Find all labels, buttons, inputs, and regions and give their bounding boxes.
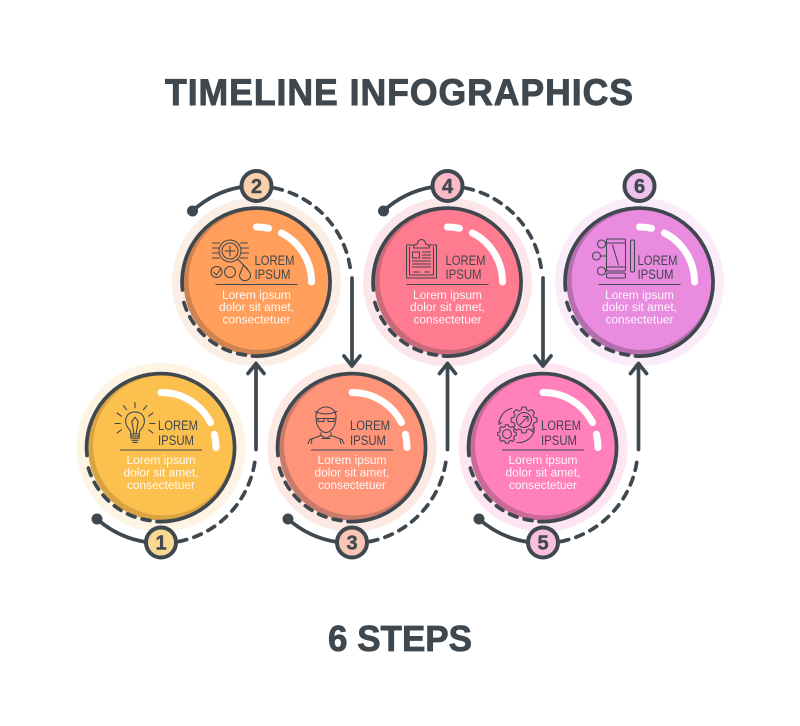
body text: consectetuer xyxy=(414,314,482,326)
body text: consectetuer xyxy=(606,314,674,326)
body text: dolor sit amet, xyxy=(314,468,390,480)
panel: step 3: IPSUM xyxy=(350,433,386,448)
number badge 3 xyxy=(337,528,367,558)
body text: dolor sit amet, xyxy=(506,468,580,480)
halos behind the step circles xyxy=(76,198,724,532)
title: TIMELINE INFOGRAPHICS xyxy=(165,72,634,113)
body text xyxy=(506,455,580,492)
body text: dolor sit amet, xyxy=(410,302,485,314)
body text: consectetuer xyxy=(127,480,195,492)
heading: LOREM xyxy=(254,253,294,268)
icon: devices xyxy=(592,239,634,278)
connector and arrow xyxy=(187,187,360,366)
number badge 3: 3 xyxy=(346,532,358,554)
number badge 6 xyxy=(624,171,654,201)
body text xyxy=(124,455,198,492)
icon: magnifier and checks xyxy=(211,240,250,281)
body text: Lorem ipsum xyxy=(318,455,386,467)
connector and arrow xyxy=(282,364,456,542)
heading: LOREM xyxy=(638,253,678,268)
body text xyxy=(314,455,390,492)
body text xyxy=(219,290,294,326)
panel: step 2 xyxy=(182,171,360,366)
number badge 1: 1 xyxy=(155,532,167,554)
panel: step 1: IPSUM xyxy=(158,433,194,448)
body text xyxy=(602,290,677,326)
number badge 5 xyxy=(528,528,558,558)
panel: step 6 xyxy=(565,171,713,356)
heading: LOREM xyxy=(350,418,390,433)
body text: dolor sit amet, xyxy=(219,302,294,314)
body text xyxy=(410,290,485,326)
icon: person with glasses xyxy=(308,407,344,444)
icon: clipboard xyxy=(406,240,436,278)
panel: step 3 xyxy=(278,364,456,558)
connector and arrow xyxy=(474,364,646,542)
panel: step 6: IPSUM xyxy=(638,267,674,282)
icon: gears xyxy=(498,407,537,443)
connector and arrow xyxy=(92,364,264,542)
number badge 2: 2 xyxy=(251,176,262,198)
panel: step 4: IPSUM xyxy=(446,267,482,282)
heading: LOREM xyxy=(446,253,486,268)
number badge 5: 5 xyxy=(537,532,549,554)
number badge 4 xyxy=(432,171,462,201)
icon: light bulb xyxy=(115,402,155,442)
number badge 6: 6 xyxy=(634,176,645,198)
body text: Lorem ipsum xyxy=(222,290,291,302)
body text: consectetuer xyxy=(222,314,291,326)
number badge 1 xyxy=(146,528,176,558)
heading: LOREM xyxy=(158,418,198,433)
body text: Lorem ipsum xyxy=(508,455,578,467)
number badge 2 xyxy=(242,171,272,201)
panel: step 2: IPSUM xyxy=(254,267,290,282)
body text: consectetuer xyxy=(318,480,386,492)
body text: Lorem ipsum xyxy=(413,290,482,302)
number badge 4: 4 xyxy=(442,176,454,198)
body text: dolor sit amet, xyxy=(602,302,677,314)
subtitle: 6 STEPS xyxy=(328,618,472,659)
panel: step 4 xyxy=(373,171,551,366)
panel: step 5 xyxy=(469,364,646,558)
panel: step 5: IPSUM xyxy=(541,433,577,448)
body text: Lorem ipsum xyxy=(126,455,196,467)
body text: consectetuer xyxy=(509,480,577,492)
body text: Lorem ipsum xyxy=(605,290,674,302)
heading: LOREM xyxy=(541,418,581,433)
body text: dolor sit amet, xyxy=(124,468,198,480)
panel: step 1 xyxy=(87,364,264,558)
connector and arrow xyxy=(378,187,551,366)
